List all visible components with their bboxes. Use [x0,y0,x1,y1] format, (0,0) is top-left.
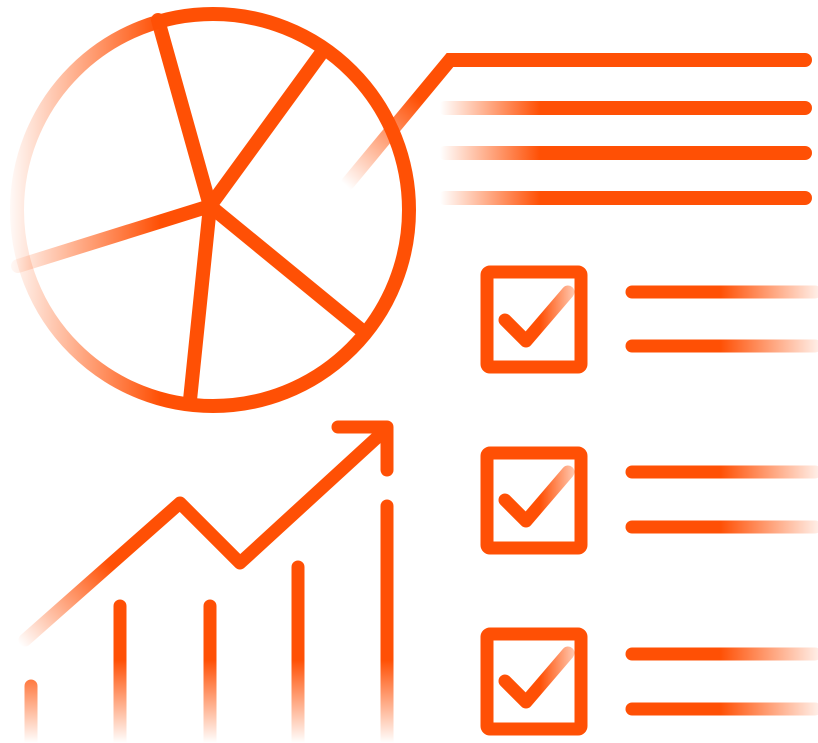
bar chart with trend arrow [25,427,387,743]
checklist item 3 [487,634,815,729]
checklist item 1 [487,272,815,367]
checklist item 2 [487,453,815,548]
pie chart [17,14,409,406]
leader line with text lines [348,60,805,198]
